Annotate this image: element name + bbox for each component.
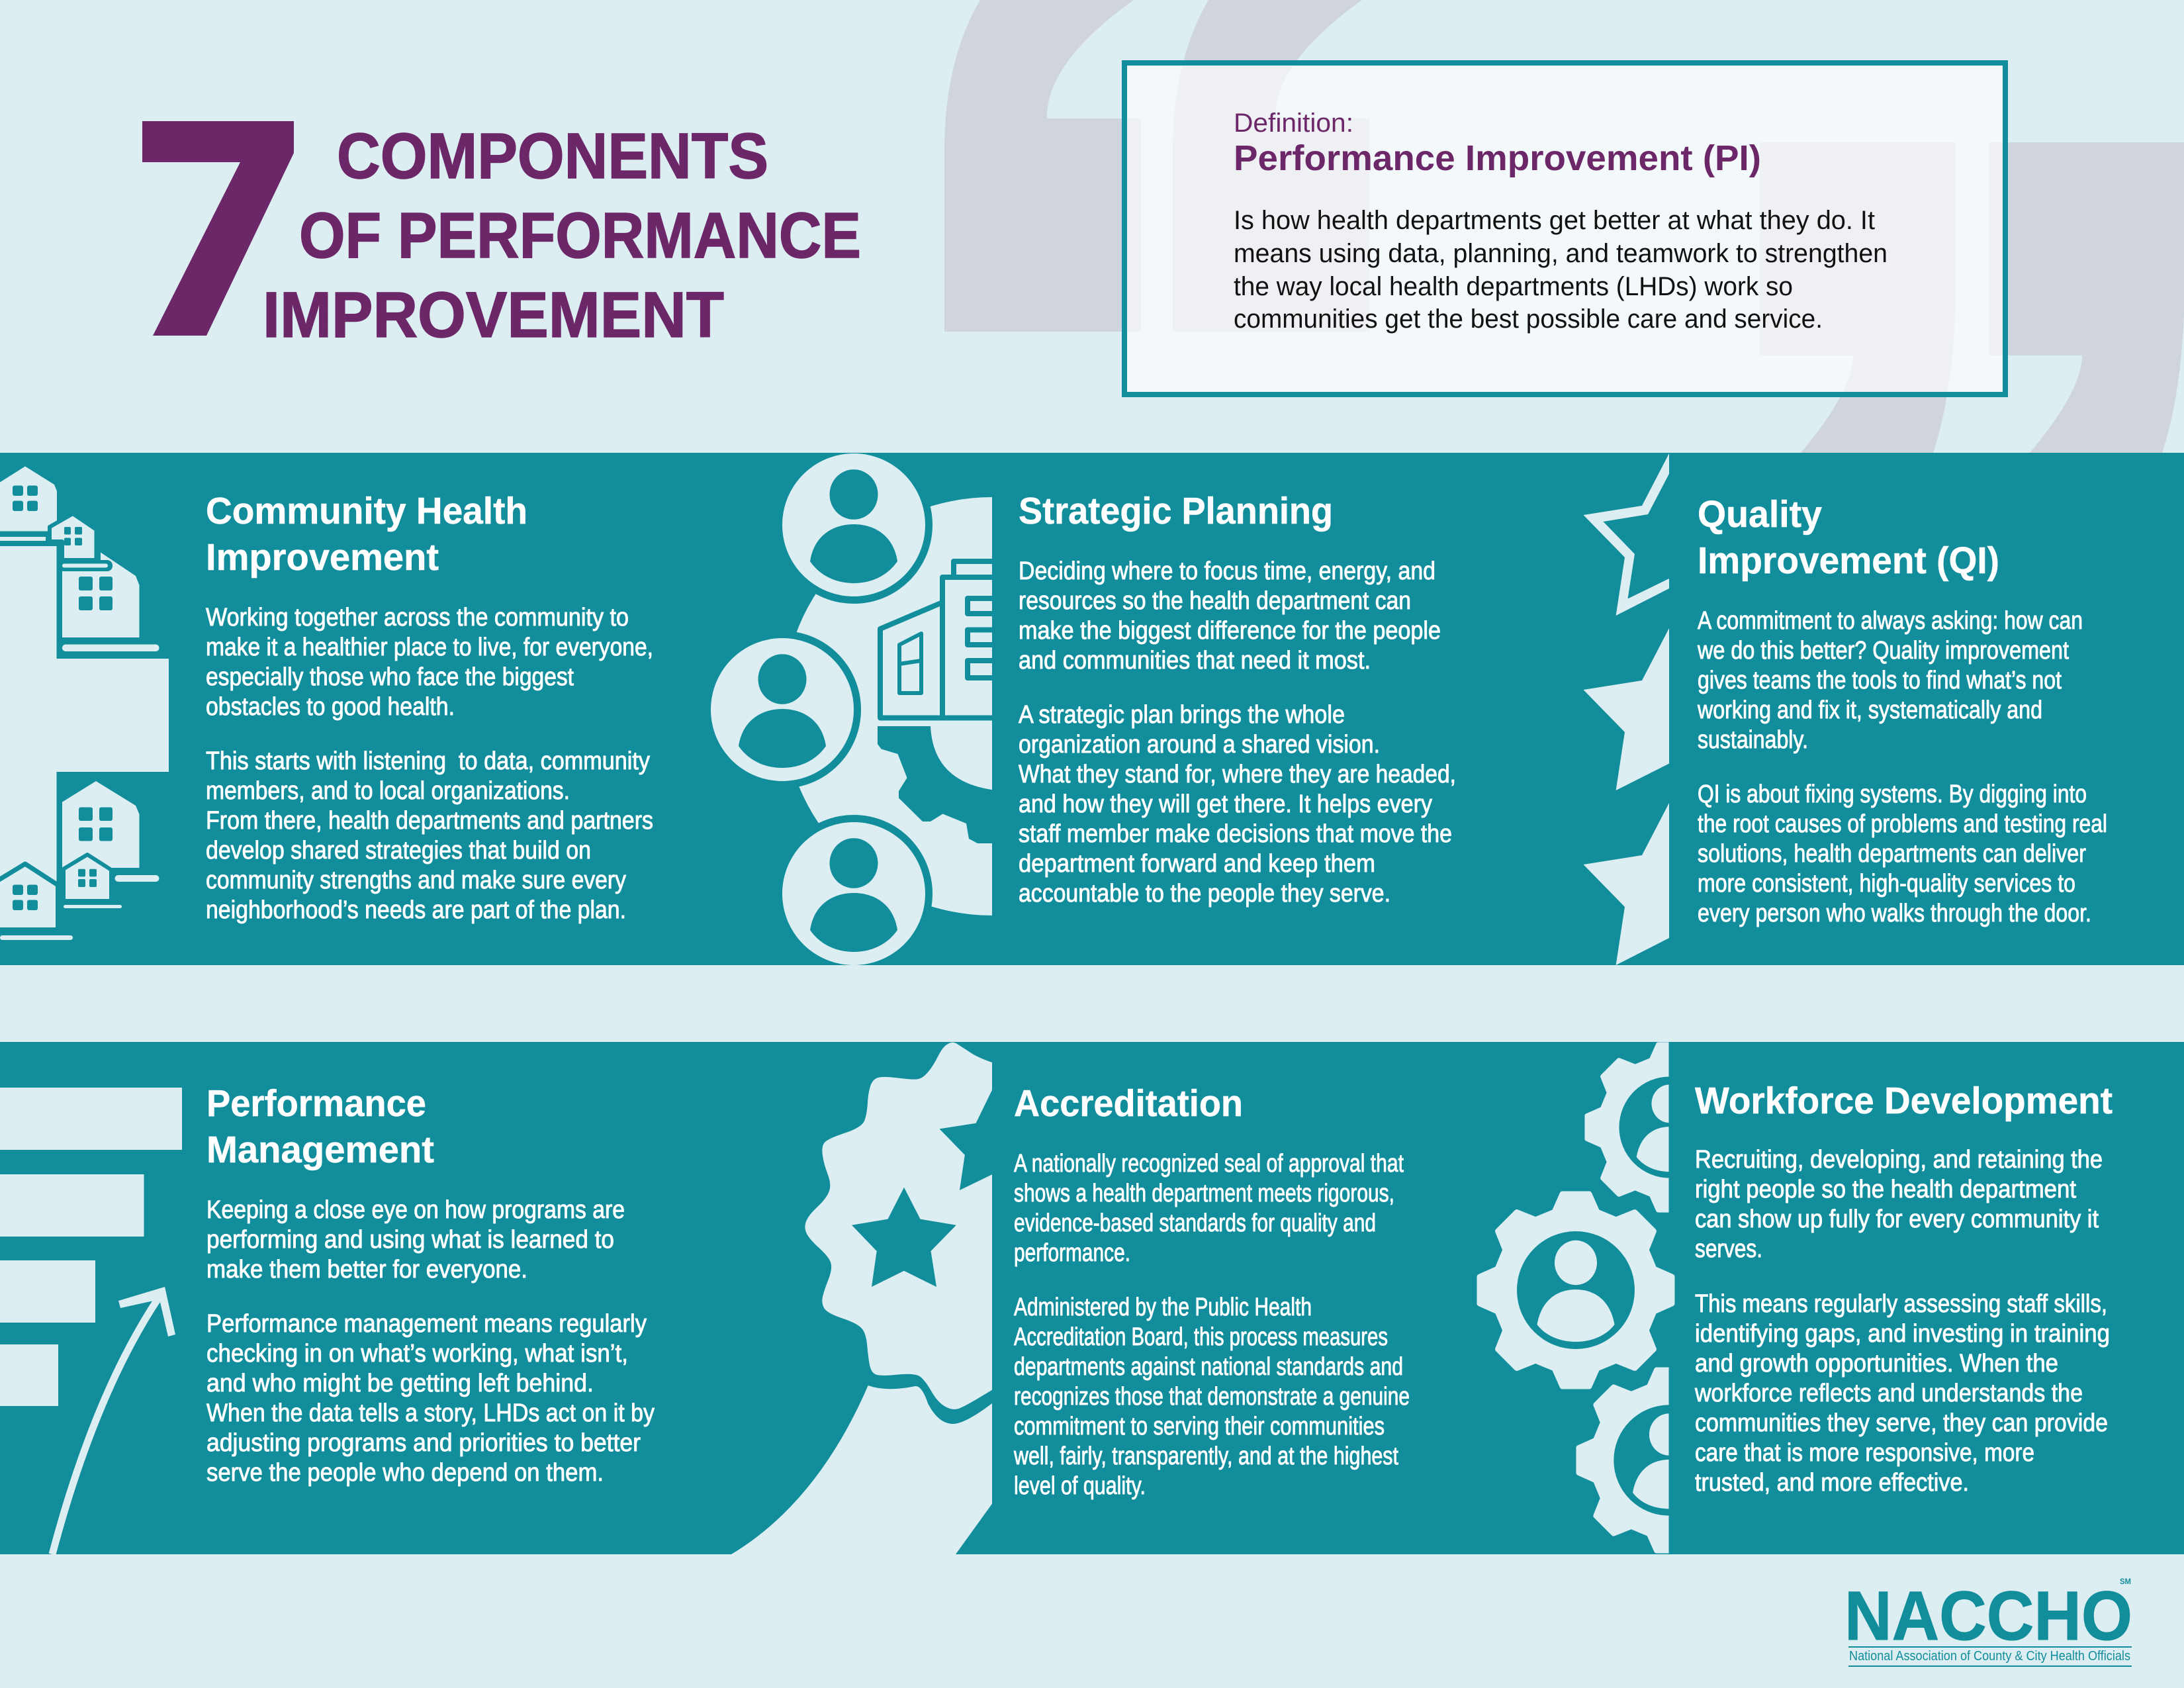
heading: Strategic Planning <box>1019 490 1333 532</box>
big number 7 <box>142 121 294 336</box>
logo: NACCHO: National Association of County & City Health Officials <box>1849 1649 2130 1664</box>
body text: From there, health departments and partners <box>206 807 653 835</box>
body text: A commitment to always asking: how can <box>1698 607 2083 635</box>
body text <box>1694 1146 2110 1497</box>
body text: serve the people who depend on them. <box>206 1459 604 1487</box>
star <box>852 1188 956 1287</box>
body text: especially those who face the biggest <box>206 663 574 691</box>
body text: and who might be getting left behind. <box>206 1370 594 1397</box>
body text: right people so the health department <box>1695 1176 2076 1203</box>
definition text: the way local health departments (LHDs) work so <box>1234 272 1793 301</box>
definition text: Is how health departments get better at what they do. It <box>1234 206 1875 235</box>
body text: Accreditation Board, this process measures <box>1014 1323 1388 1351</box>
body text: we do this better? Quality improvement <box>1697 637 2069 665</box>
definition heading: Performance Improvement (PI) <box>1234 138 1761 178</box>
definition text: communities get the best possible care and service. <box>1234 305 1823 334</box>
body text: workforce reflects and understands the <box>1694 1380 2083 1407</box>
body text: and growth opportunities. When the <box>1695 1350 2058 1378</box>
person circle bottom <box>775 815 933 972</box>
panel: definition <box>1124 63 2005 395</box>
body text: Working together across the community to <box>206 604 629 632</box>
title: IMPROVEMENT <box>263 279 724 351</box>
body text <box>206 604 653 924</box>
heading: Management <box>206 1129 434 1171</box>
body text: can show up fully for every community it <box>1695 1205 2099 1233</box>
title: OF PERFORMANCE <box>299 199 861 271</box>
gear bottom <box>1576 1368 1669 1553</box>
body text: trusted, and more effective. <box>1695 1469 1969 1497</box>
panel: accreditation <box>1013 1082 1410 1500</box>
body text: identifying gaps, and investing in training <box>1695 1320 2110 1348</box>
heading: Accreditation <box>1014 1082 1243 1125</box>
icon: neighborhood houses <box>0 466 169 940</box>
body text: When the data tells a story, LHDs act on it by <box>206 1399 655 1427</box>
body text: commitment to serving their communities <box>1014 1413 1385 1440</box>
body text: QI is about fixing systems. By digging into <box>1698 780 2087 808</box>
body text: every person who walks through the door. <box>1698 900 2091 927</box>
body text: shows a health department meets rigorous, <box>1014 1180 1394 1207</box>
body text: evidence-based standards for quality and <box>1014 1209 1376 1237</box>
definition text: means using data, planning, and teamwork to strengthen <box>1234 239 1888 268</box>
body text: communities they serve, they can provide <box>1695 1409 2108 1437</box>
body text: obstacles to good health. <box>206 693 455 721</box>
body text: performance. <box>1014 1239 1130 1267</box>
body text: gives teams the tools to find what’s not <box>1698 667 2062 694</box>
definition label: Definition: <box>1234 109 1353 138</box>
body text <box>206 1196 655 1487</box>
icon: people and building on gear <box>711 453 992 965</box>
body text: What they stand for, where they are headed, <box>1019 761 1456 788</box>
body text: This means regularly assessing staff skills, <box>1695 1290 2107 1318</box>
body text: A strategic plan brings the whole <box>1019 701 1345 729</box>
body text <box>1013 1150 1410 1500</box>
body text: adjusting programs and priorities to better <box>206 1429 641 1457</box>
body text <box>1019 557 1456 908</box>
body text: make them better for everyone. <box>206 1256 527 1284</box>
heading: Quality <box>1698 493 1822 536</box>
heading: Workforce Development <box>1695 1080 2113 1122</box>
body text: develop shared strategies that build on <box>206 837 591 865</box>
body text: care that is more responsive, more <box>1695 1439 2034 1467</box>
heading <box>206 1082 434 1171</box>
body text: performing and using what is learned to <box>206 1226 614 1254</box>
body text: Deciding where to focus time, energy, and <box>1019 557 1435 585</box>
body text: organization around a shared vision. <box>1019 731 1380 759</box>
body text: well, fairly, transparently, and at the highest <box>1013 1442 1398 1470</box>
panel: top band <box>0 453 2184 965</box>
body text: accountable to the people they serve. <box>1019 880 1390 908</box>
panel: performance management <box>206 1082 655 1487</box>
panel: community health improvement <box>206 490 653 924</box>
body text: make the biggest difference for the people <box>1019 617 1441 645</box>
heading <box>1698 493 1999 582</box>
icon: workforce gears <box>1477 1042 1674 1553</box>
body text: department forward and keep them <box>1019 850 1375 878</box>
panel: workforce development <box>1694 1080 2113 1497</box>
panel: bottom band <box>0 1042 2184 1554</box>
body text: community strengths and make sure every <box>206 867 626 894</box>
heading <box>206 490 527 579</box>
logo: NACCHO: SM <box>2120 1577 2131 1586</box>
body text: Recruiting, developing, and retaining the <box>1695 1146 2103 1174</box>
body text: the root causes of problems and testing real <box>1698 810 2107 838</box>
panel: strategic planning <box>1019 490 1456 908</box>
building outline <box>880 561 992 718</box>
body text: solutions, health departments can deliver <box>1698 840 2086 868</box>
heading: Improvement <box>206 536 439 579</box>
body text: level of quality. <box>1014 1472 1146 1500</box>
body text: checking in on what’s working, what isn’t, <box>206 1340 628 1368</box>
person circle middle <box>704 631 861 788</box>
body text <box>1697 607 2107 927</box>
body text: and communities that need it most. <box>1019 647 1371 675</box>
title: COMPONENTS <box>337 120 768 192</box>
body text: staff member make decisions that move the <box>1019 820 1452 848</box>
body text: neighborhood’s needs are part of the plan. <box>206 896 626 924</box>
body text: resources so the health department can <box>1019 587 1411 615</box>
body text: make it a healthier place to live, for everyone, <box>206 633 653 661</box>
arrow <box>52 1287 175 1554</box>
body text: sustainably. <box>1698 726 1808 754</box>
icon: three stars <box>1583 453 1669 965</box>
body text: Keeping a close eye on how programs are <box>206 1196 625 1224</box>
body text: Administered by the Public Health <box>1014 1293 1312 1321</box>
body text: and how they will get there. It helps every <box>1019 790 1432 818</box>
body text: This starts with listening to data, community <box>206 747 650 775</box>
gear cutout <box>878 726 992 843</box>
panel: quality improvement <box>1697 493 2107 927</box>
icon: bar chart with arrow <box>0 1088 182 1554</box>
definition text <box>1234 206 1888 334</box>
heading: Community Health <box>206 490 527 532</box>
heading: Improvement (QI) <box>1698 539 1999 582</box>
logo: NACCHO: NACCHO <box>1844 1577 2132 1655</box>
body text: working and fix it, systematically and <box>1697 696 2042 724</box>
decorative quotation marks <box>944 0 2184 453</box>
body text: serves. <box>1695 1235 1762 1263</box>
icon: accreditation seal <box>731 1043 992 1554</box>
title <box>263 120 861 351</box>
body text: Performance management means regularly <box>206 1310 647 1338</box>
body text: more consistent, high-quality services to <box>1698 870 2075 898</box>
person circle top <box>775 446 933 604</box>
body text: departments against national standards and <box>1014 1353 1403 1381</box>
body text: A nationally recognized seal of approval that <box>1014 1150 1404 1178</box>
heading: Performance <box>206 1082 426 1125</box>
body text: members, and to local organizations. <box>206 777 570 805</box>
gear middle <box>1480 1194 1672 1386</box>
body text: recognizes those that demonstrate a genuine <box>1014 1383 1410 1411</box>
gear top <box>1584 1042 1669 1213</box>
